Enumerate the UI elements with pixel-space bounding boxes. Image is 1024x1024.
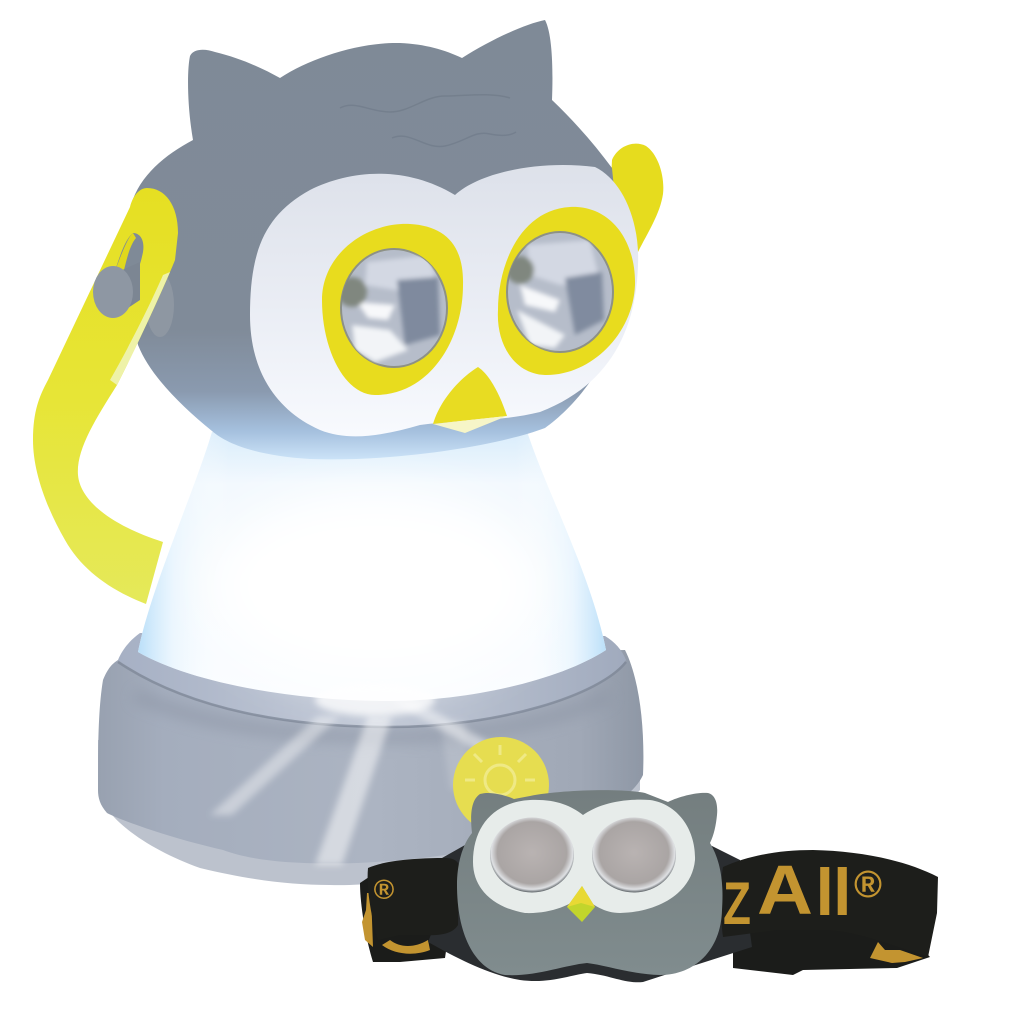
strap brand: Z [723,870,751,937]
strap brand: A [757,851,813,929]
lantern button [453,737,549,833]
right strap front band [721,850,938,957]
rear strap right [733,915,930,975]
wave marks on head [340,95,516,147]
base body [98,650,643,863]
owl ears and body [457,790,722,975]
lantern base [98,633,643,885]
dome glow [210,490,540,680]
left strap gold letter [362,893,373,947]
rear strap left [360,875,455,962]
owl face [250,165,638,436]
handle slot [112,233,143,292]
light rays on base [210,700,540,865]
headlamp eyes [490,818,574,892]
strap brand [723,851,882,937]
handle strap [33,188,178,604]
base bottom band [98,740,640,885]
glowing dome [138,425,606,716]
owl head [128,20,625,459]
lower right gold mark [870,942,923,963]
bracket [428,845,752,982]
strap lit edge [110,272,170,385]
headlamp face [473,800,695,913]
rear knob disc [146,273,174,337]
left strap front loop [368,858,459,940]
beak [433,367,507,433]
right handle tab [610,144,663,252]
headlamp beak [567,886,595,922]
right eye [498,207,635,375]
base shadow under rim [135,695,610,737]
strap brand: II [816,852,851,930]
left eye [322,224,463,395]
headlamp [360,790,938,982]
strap brand: ® [854,864,882,906]
left strap logo: ® [374,874,395,905]
base rim [118,633,626,727]
front knob [93,262,140,318]
